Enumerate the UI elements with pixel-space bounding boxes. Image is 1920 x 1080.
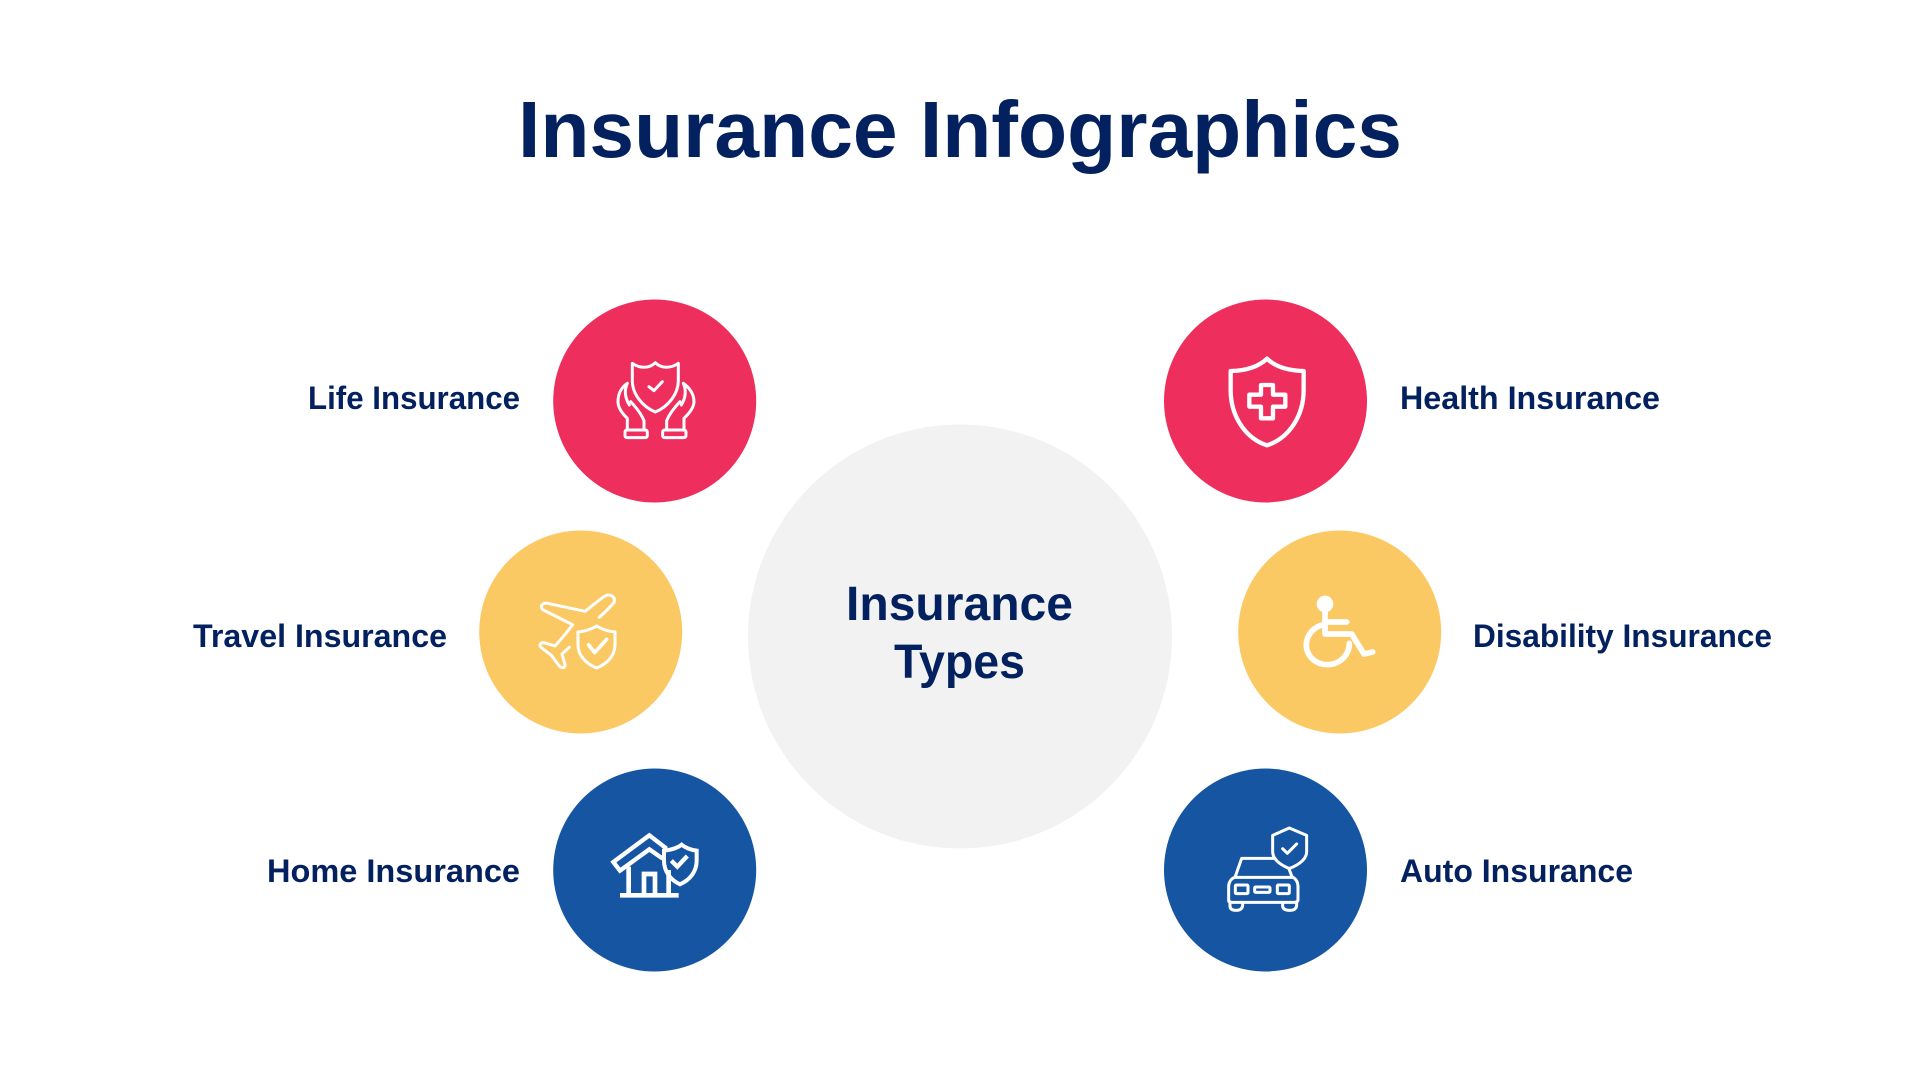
panel: auto insurance [1164,768,1633,972]
panel: travel insurance [193,530,682,734]
label: health insurance: Health Insurance [1400,380,1660,416]
label: travel insurance: Travel Insurance [193,618,447,654]
panel: disability insurance [1238,530,1772,734]
title: Insurance Infographics [518,85,1402,174]
label: home insurance: Home Insurance [267,853,520,889]
icon: car and shield [1229,828,1307,910]
center circle: Insurance Types: Insurance [846,578,1073,631]
label: auto insurance: Auto Insurance [1400,853,1633,889]
panel: home insurance [267,768,756,972]
icon: hands holding shield [618,363,694,438]
icon: airplane and shield [540,595,615,668]
panel: life insurance [308,300,756,502]
label: life insurance: Life Insurance [308,380,520,416]
center circle: Insurance Types [748,424,1172,848]
icon: shield with medical cross [1231,359,1304,445]
icon: wheelchair [1306,596,1373,665]
panel: health insurance [1164,300,1660,502]
center circle: Insurance Types: Types [894,636,1025,689]
label: disability insurance: Disability Insurance [1473,618,1772,654]
icon: house and shield [613,835,697,895]
